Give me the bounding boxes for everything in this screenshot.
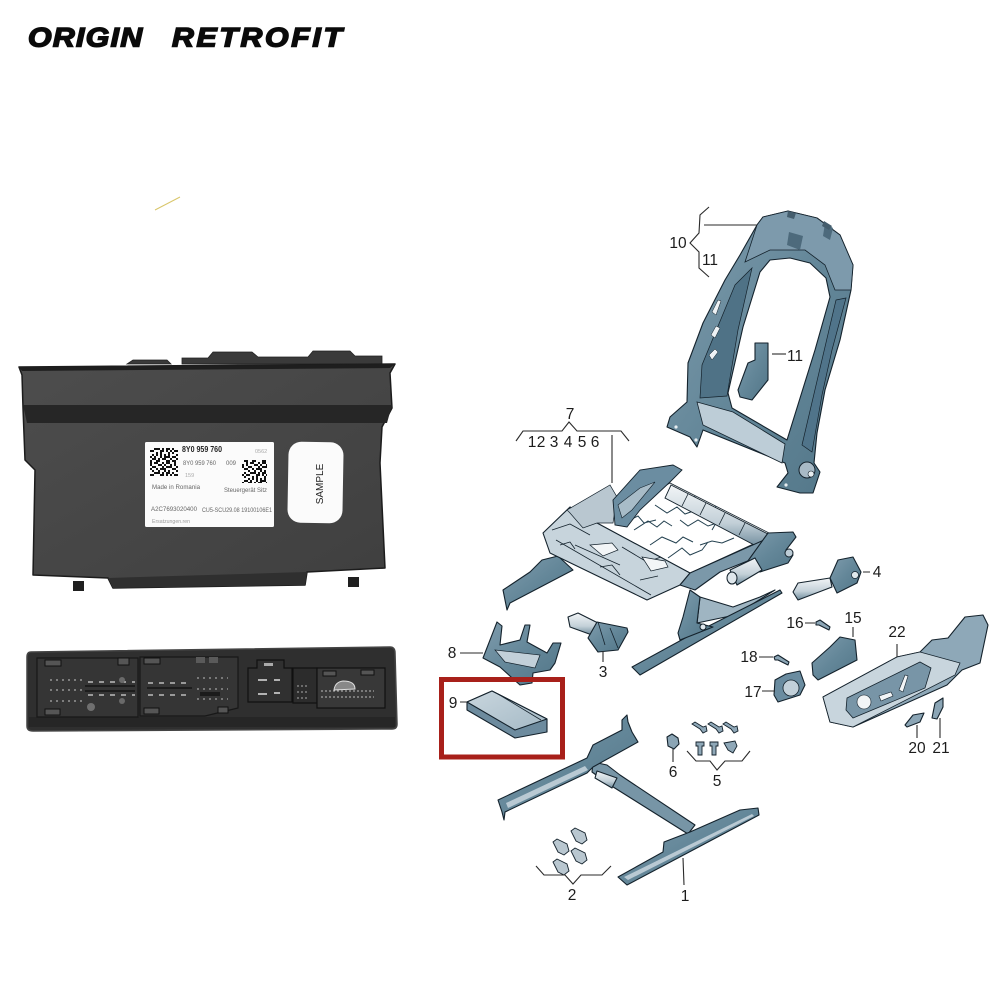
connector socket 1 <box>37 658 138 717</box>
callout numbers: 10 <box>669 235 687 252</box>
callout numbers: 5 <box>578 434 586 451</box>
parts diagram <box>442 207 988 905</box>
top connectors <box>127 351 382 364</box>
callout numbers: 4 <box>873 564 882 581</box>
part 11: actuator <box>738 343 768 400</box>
foam pad <box>567 485 617 528</box>
yellow speck <box>155 197 180 210</box>
part 22: seat switch panel <box>823 615 988 727</box>
callout numbers: 5 <box>713 773 721 790</box>
callout numbers: 1 <box>528 434 536 451</box>
wire springs opening <box>597 483 773 573</box>
callout numbers: 6 <box>591 434 599 451</box>
callout numbers: 17 <box>744 684 762 701</box>
callout numbers: 18 <box>740 649 758 666</box>
lower cross beam <box>697 402 785 463</box>
mounting pins <box>73 581 84 591</box>
part label sticker: 8Y0 959 760 <box>183 461 217 467</box>
part 21: button <box>932 698 943 719</box>
callout numbers: 15 <box>844 610 862 627</box>
part 6: nut <box>667 734 679 749</box>
part label sticker <box>145 442 274 527</box>
title: brand logo: RETROFIT <box>172 23 345 53</box>
callout numbers: 11 <box>702 252 718 269</box>
module body <box>19 364 395 588</box>
part label sticker: Made in Romania <box>152 484 200 491</box>
callout numbers: 3 <box>550 434 558 451</box>
photo: control module top view <box>19 351 395 591</box>
left rail <box>503 556 573 610</box>
part label sticker: 159 <box>185 473 194 479</box>
callout numbers: 21 <box>932 740 950 757</box>
part label sticker: 8Y0 959 760 <box>182 444 222 454</box>
callout numbers: 22 <box>888 624 906 641</box>
callout numbers: 9 <box>449 695 457 712</box>
part 9: control module <box>467 691 547 738</box>
callout numbers: 2 <box>568 887 576 904</box>
part label sticker: A2C7693020400 <box>151 506 197 513</box>
red highlight box around part 9 <box>442 680 562 757</box>
part label sticker: CU5-SCU29.08 19100106E1 <box>202 507 272 514</box>
connector socket 4 <box>293 668 317 703</box>
rollers <box>665 485 770 548</box>
part 20: button <box>905 713 924 727</box>
title: brand logo: ORIGIN <box>28 23 144 53</box>
callout numbers: 3 <box>599 664 607 681</box>
seat bracket <box>613 465 682 527</box>
callout numbers: 4 <box>564 434 573 451</box>
connector socket 3 <box>248 660 292 702</box>
callout numbers: 20 <box>908 740 926 757</box>
left rail <box>498 715 638 820</box>
part label sticker: Ersatzungen.ren <box>152 519 190 525</box>
cross bar <box>592 762 695 834</box>
part 3: motor <box>568 613 628 652</box>
upright bracket <box>678 590 713 640</box>
recliner rail <box>632 590 782 675</box>
actuator cylinder <box>730 558 762 585</box>
part 10: backrest frame <box>667 211 853 493</box>
callout numbers: 1 <box>681 888 689 905</box>
right rail <box>618 808 759 885</box>
part label sticker: Steuergerät Sitz <box>224 487 267 494</box>
connector socket 5 <box>317 668 385 708</box>
part 5: bolts <box>692 722 738 755</box>
part 1: seat rails <box>498 715 759 885</box>
connector socket 2 <box>140 657 238 716</box>
photo: control module connector face <box>27 647 397 731</box>
part label sticker: 0562 <box>255 449 267 455</box>
side bracket <box>745 532 796 572</box>
part 15: switch housing <box>812 637 857 680</box>
part 2: bolts <box>553 828 587 875</box>
sample sticker <box>287 442 344 523</box>
sample sticker: SAMPLE <box>315 463 326 504</box>
callout numbers: 2 <box>537 434 545 451</box>
callout numbers <box>448 235 950 905</box>
part 16: bolt <box>816 620 830 630</box>
part 8: bracket <box>483 622 561 685</box>
callout numbers: 8 <box>448 645 456 662</box>
front bar <box>680 536 775 590</box>
callout numbers: 16 <box>786 615 804 632</box>
part 18: bolt <box>774 655 789 665</box>
callout numbers: 11 <box>787 348 803 365</box>
title: brand logo <box>28 23 345 53</box>
part 17: rotary switch <box>774 671 805 702</box>
callout numbers: 6 <box>669 764 677 781</box>
side panels <box>700 268 752 398</box>
part 4: motor <box>793 557 861 600</box>
dark strip <box>23 405 392 423</box>
top plate <box>745 211 853 290</box>
part 7: seat cushion frame <box>503 465 796 675</box>
part label sticker: 009 <box>226 461 237 467</box>
callout numbers: 7 <box>566 406 574 423</box>
strut <box>697 590 775 623</box>
seat pan <box>543 507 690 600</box>
leader lines and brackets <box>460 207 940 885</box>
